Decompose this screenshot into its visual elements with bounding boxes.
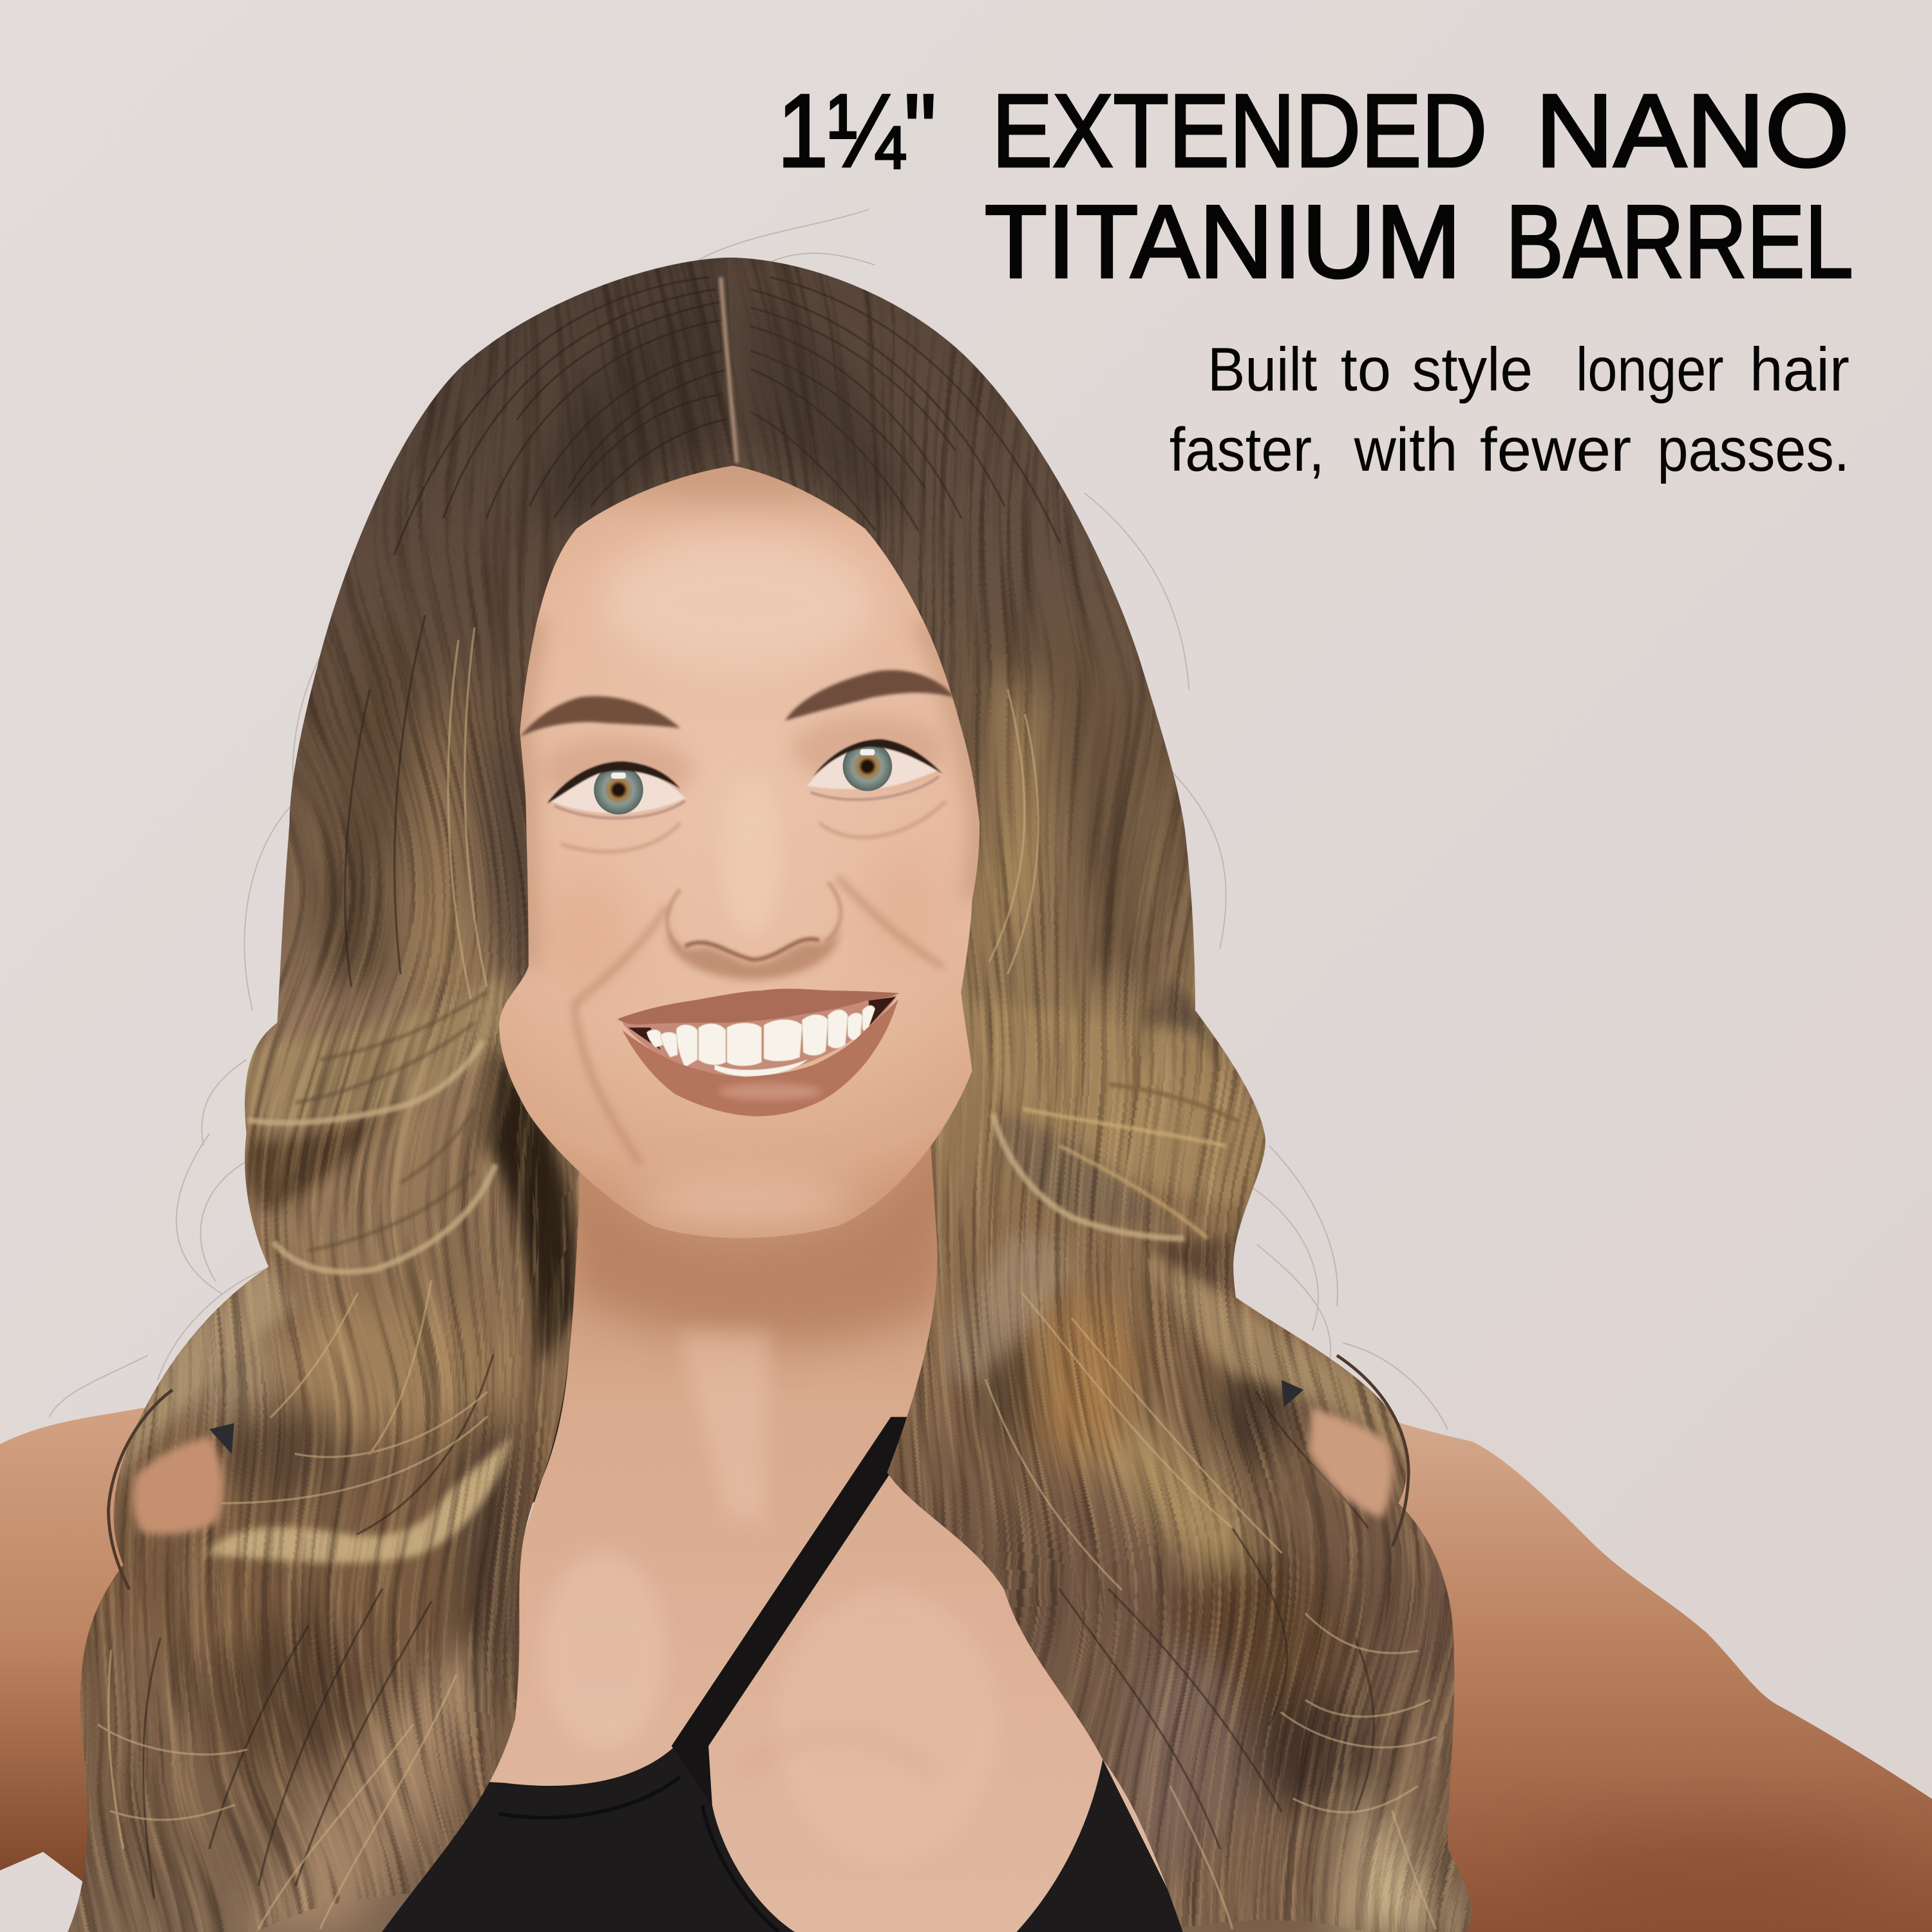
hair shadow on face edges	[520, 620, 980, 966]
skin gap under left hair loop	[133, 1437, 223, 1535]
lower lip	[622, 999, 898, 1116]
right eyebrow	[785, 670, 955, 721]
lip gloss	[718, 1083, 822, 1101]
flyaway hair	[50, 209, 1577, 1922]
subheading line 1: hair	[1750, 336, 1850, 404]
left hair texture dark	[0, 123, 862, 1932]
nose wings	[667, 882, 840, 949]
headline line 1	[777, 73, 1850, 189]
bra strap fragments	[209, 1380, 1303, 1454]
neck and chest highlights	[542, 1331, 998, 1861]
headline line 2	[985, 184, 1853, 299]
headline line 1: 1¼"	[777, 73, 936, 189]
right outer dark panel	[1133, 973, 1232, 1097]
left curl rims	[248, 1041, 495, 1272]
left hair mass	[68, 258, 738, 1932]
subheading line 2: faster,	[1170, 415, 1325, 484]
right hair shading	[739, 296, 1454, 1932]
left lower lock	[113, 1259, 296, 1484]
left eye	[547, 761, 685, 818]
arm shading	[1528, 1830, 1897, 1916]
nose	[667, 882, 840, 980]
right hair texture dark	[616, 123, 1602, 1932]
nose base shading	[668, 922, 839, 980]
right eye	[807, 739, 943, 800]
mouth	[618, 989, 900, 1116]
neck and chest	[370, 1146, 1195, 1932]
subheading line 1: longer	[1576, 336, 1724, 404]
subheading line 2: with	[1354, 415, 1457, 484]
neckline band	[499, 1777, 680, 1818]
face shading	[536, 446, 949, 1229]
left lock streaks	[296, 992, 487, 1251]
right curl hollow	[1003, 1115, 1164, 1224]
back hair behind neck	[493, 986, 1010, 1503]
subheading line 2: fewer	[1480, 415, 1631, 484]
nose bridge highlight	[722, 776, 781, 936]
right arm and shoulder	[1171, 1386, 1932, 1932]
left curl shadow	[248, 1115, 376, 1214]
subheading line 1: Built	[1208, 336, 1317, 404]
eye socket tone	[540, 717, 945, 802]
teeth	[647, 1005, 875, 1076]
mouth dark corners	[629, 997, 896, 1050]
upper lip	[618, 989, 900, 1025]
right hair mass	[616, 123, 1602, 1932]
hair part line	[721, 277, 737, 463]
left arm and shoulder	[0, 1405, 320, 1932]
V edge band	[703, 1805, 779, 1932]
right long tan lock	[1137, 1245, 1411, 1460]
right hair strands	[752, 277, 1435, 1928]
left eyebrow	[520, 696, 680, 737]
face skin	[499, 466, 980, 1238]
right lock streaks	[1023, 1084, 1238, 1238]
hair dark strands near shoulders	[108, 1356, 1408, 1589]
dark shadow beside jaw	[487, 1047, 579, 1368]
right grey light lock	[947, 1232, 1072, 1386]
subheading line 2	[1170, 415, 1850, 484]
top left panel	[345, 1746, 795, 1932]
headline line 2: BARREL	[1506, 184, 1853, 299]
subheading line 1	[1208, 336, 1850, 404]
mouth interior	[622, 996, 897, 1077]
dark chunk under curl	[1140, 1236, 1238, 1298]
left highlight ribbon	[204, 1435, 511, 1563]
left hair strands	[99, 277, 727, 1928]
black halter top	[345, 1417, 1189, 1932]
left hair texture light	[0, 123, 862, 1932]
left hair shading	[163, 308, 729, 1932]
right hair texture light	[616, 123, 1602, 1932]
headline	[777, 73, 1853, 299]
left curl	[244, 1072, 506, 1271]
chest crease	[739, 1735, 936, 1774]
subheading line 1: style	[1412, 336, 1533, 404]
subheading line 1: to	[1341, 336, 1391, 404]
left top lock	[237, 973, 507, 1126]
right upper lock	[967, 999, 1265, 1208]
neck shadow under chin	[569, 1133, 956, 1344]
top right panel	[1016, 1759, 1189, 1932]
halter strap	[672, 1417, 928, 1805]
headline line 1: EXTENDED	[992, 73, 1487, 189]
subheading line 2: passes.	[1657, 415, 1850, 484]
headline line 2: TITANIUM	[985, 184, 1461, 299]
eye bags	[561, 801, 946, 852]
right curl rim	[993, 1114, 1184, 1238]
smile lines	[574, 877, 943, 1164]
subheading	[1170, 336, 1850, 484]
skin gap under right hair loop	[1309, 1407, 1393, 1518]
headline line 1: NANO	[1535, 73, 1850, 189]
face	[499, 446, 980, 1238]
